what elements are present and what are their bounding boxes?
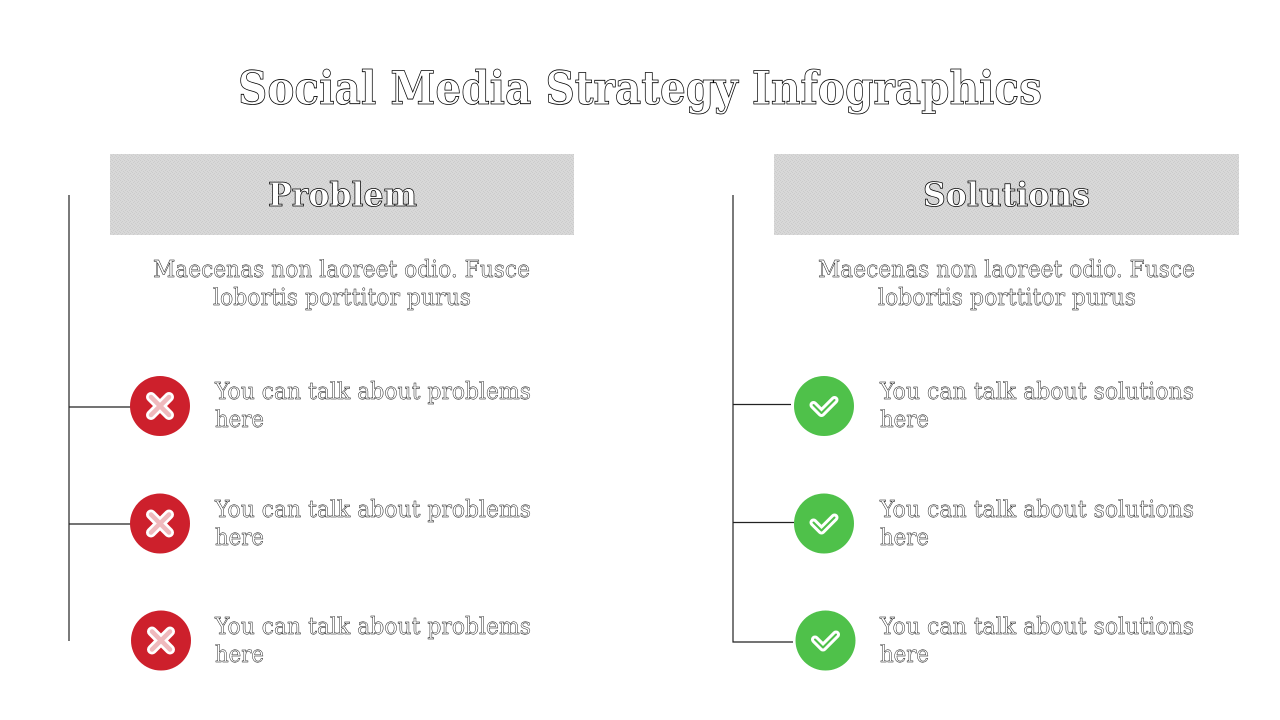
icon: red cross xyxy=(131,610,191,670)
problem item 3 text xyxy=(214,614,531,668)
problem item 2 text xyxy=(214,497,531,551)
solutions item 1 text: You can talk about solutions xyxy=(879,379,1194,405)
problem heading bar xyxy=(110,154,574,235)
solutions item 2 xyxy=(794,494,1194,554)
icon: red cross xyxy=(130,376,190,436)
problem item 3 xyxy=(131,610,531,670)
solutions item 2 text: here xyxy=(880,525,929,551)
problem item 1 xyxy=(130,376,531,436)
problem item 3 text: You can talk about problems xyxy=(214,614,531,640)
title: Social Media Strategy Infographics xyxy=(238,61,1042,115)
solutions item 1 text xyxy=(879,379,1194,433)
panel: solutions xyxy=(733,154,1239,670)
solutions item 3 text: You can talk about solutions xyxy=(879,614,1194,640)
solutions item 3 text: here xyxy=(880,642,929,668)
icon: green check xyxy=(794,376,854,436)
solutions item 1 xyxy=(794,376,1194,436)
problem item 1 text xyxy=(214,379,531,433)
solutions description xyxy=(818,257,1195,311)
solutions item 2 text xyxy=(879,497,1194,551)
problem heading: Problem xyxy=(268,175,417,214)
panel: problem xyxy=(69,154,574,670)
solutions item 2 text: You can talk about solutions xyxy=(879,497,1194,523)
problem description xyxy=(153,257,530,311)
problem item 1 text: You can talk about problems xyxy=(214,379,531,405)
icon: green check xyxy=(796,610,856,670)
solutions item 3 xyxy=(796,610,1194,670)
solutions heading bar xyxy=(774,154,1239,235)
problem description: Maecenas non laoreet odio. Fusce xyxy=(153,257,530,283)
problem item 1 text: here xyxy=(215,407,264,433)
solutions connector lines xyxy=(733,195,794,642)
problem item 3 text: here xyxy=(215,642,264,668)
problem connector lines xyxy=(69,195,131,641)
problem item 2 text: You can talk about problems xyxy=(214,497,531,523)
icon: green check xyxy=(794,494,854,554)
problem item 2 text: here xyxy=(215,525,264,551)
solutions heading: Solutions xyxy=(923,175,1090,214)
solutions description: Maecenas non laoreet odio. Fusce xyxy=(818,257,1195,283)
problem description: lobortis porttitor purus xyxy=(213,285,471,311)
solutions item 1 text: here xyxy=(880,407,929,433)
solutions description: lobortis porttitor purus xyxy=(878,285,1136,311)
solutions item 3 text xyxy=(879,614,1194,668)
problem item 2 xyxy=(130,494,531,554)
icon: red cross xyxy=(130,494,190,554)
